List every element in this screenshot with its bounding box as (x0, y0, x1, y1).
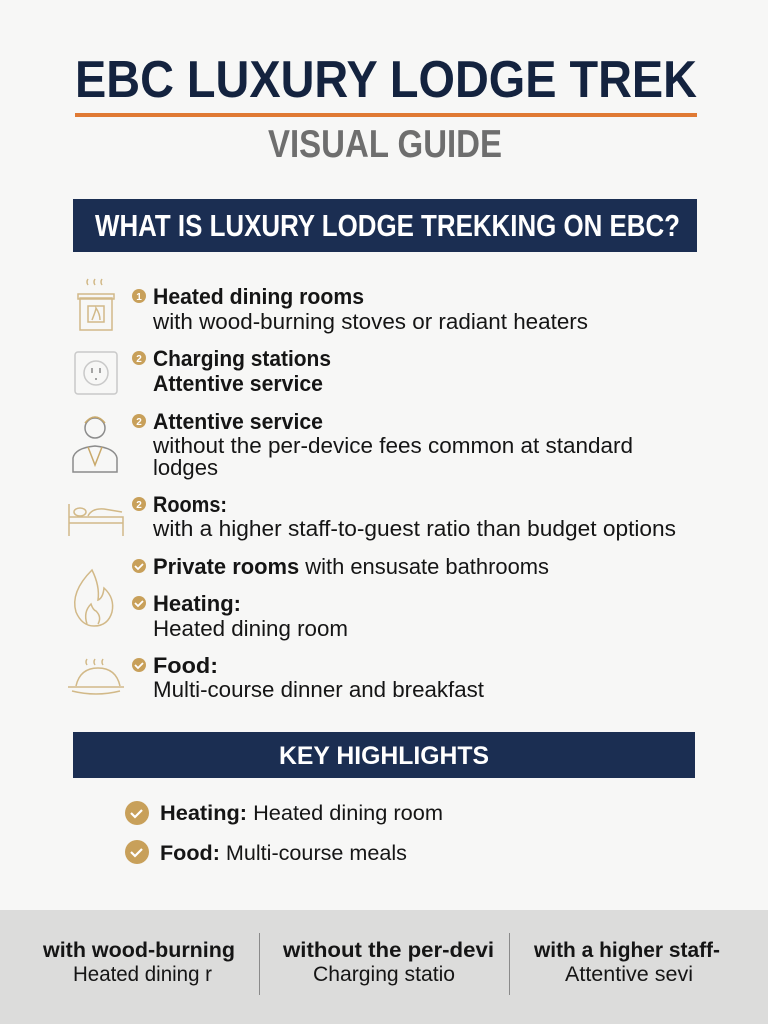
footer strip: without the per-devi (282, 939, 494, 962)
feature list: 2 (136, 500, 142, 511)
feature list: 1 (136, 292, 142, 303)
banner: what is luxury lodge trekking (73, 199, 697, 252)
feature list: 2 (136, 417, 142, 428)
icon: bed (69, 504, 123, 536)
highlights list: Heating: Heated dining room (160, 802, 443, 825)
footer strip: with a higher staff- (533, 939, 720, 962)
banner: key highlights (73, 732, 695, 778)
footer strip: Attentive sevi (565, 963, 693, 986)
badges (132, 289, 146, 672)
item 5: Private rooms with ensusate bathrooms (153, 554, 549, 579)
item 2: Charging stations (153, 346, 331, 371)
icon: outlet (75, 352, 117, 394)
item 2 (153, 346, 331, 396)
item 6: Heated dining room (153, 616, 348, 641)
icon: food platter (68, 659, 124, 694)
item 2: Attentive service (153, 371, 323, 396)
title: EBC LUXURY LODGE TREK (75, 51, 697, 109)
item 4: Rooms: (153, 492, 227, 517)
item 4: with a higher staff-to-guest ratio than budget options (152, 516, 676, 541)
item 3 (152, 409, 633, 480)
footer strip (0, 910, 768, 1024)
icon: staff person (73, 417, 117, 472)
banner: key highlights: KEY HIGHLIGHTS (279, 742, 489, 770)
item 4 (152, 492, 676, 541)
item 1: with wood-burning stoves or radiant heaters (152, 309, 588, 334)
feature list: 2 (136, 354, 142, 365)
item 7 (153, 653, 484, 702)
item 6: Heating: (153, 591, 241, 616)
highlights list: Food: Multi-course meals (160, 842, 407, 865)
item 1 (152, 284, 588, 334)
item 1: Heated dining rooms (153, 284, 364, 309)
footer strip: Heated dining r (73, 963, 212, 986)
icon: fireplace (78, 279, 114, 330)
item 6 (153, 591, 348, 641)
icon: flame (75, 570, 113, 626)
item 3: lodges (153, 455, 218, 480)
item 3: Attentive service (153, 409, 323, 434)
footer strip: Charging statio (313, 963, 455, 986)
item 3: without the per-device fees common at standard (152, 433, 633, 458)
highlights list (125, 801, 443, 865)
item 7: Food: (153, 653, 218, 678)
footer strip: with wood-burning (42, 939, 235, 962)
subtitle: VISUAL GUIDE (268, 123, 502, 166)
item 7: Multi-course dinner and breakfast (153, 677, 484, 702)
feature list (68, 279, 676, 702)
